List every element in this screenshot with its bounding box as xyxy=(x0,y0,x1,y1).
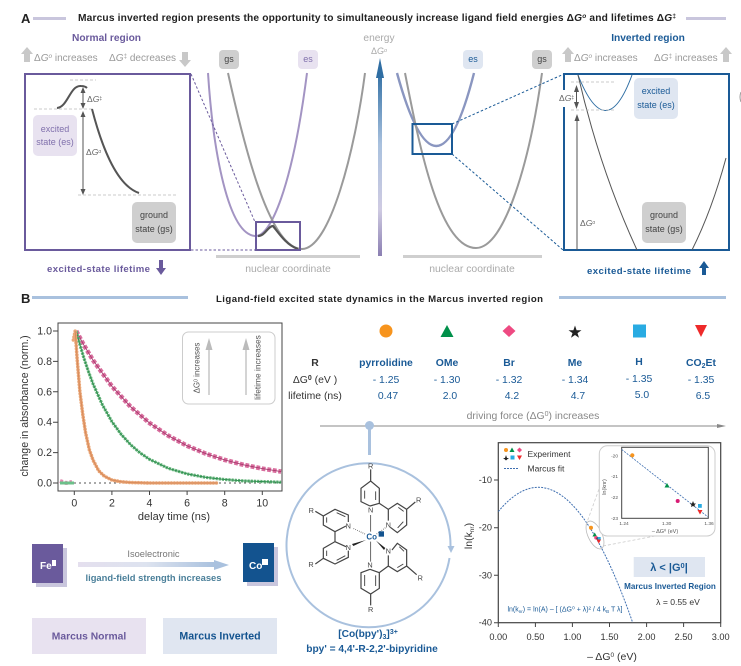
molecule structure: R xyxy=(418,573,423,582)
energy axis arrow: ΔG xyxy=(371,46,384,56)
panel: inverted region zoom: ΔG xyxy=(580,218,592,228)
inverted lifetime label xyxy=(587,261,709,277)
label gs normal xyxy=(219,50,239,69)
panel: inverted region zoom: state (gs) xyxy=(645,224,683,234)
axis ticks and labels: delay time (ns) xyxy=(138,511,210,523)
inset chart: 1.36 xyxy=(704,521,714,527)
panel: normal region zoom: ground xyxy=(140,210,168,220)
section A heading: ‡ xyxy=(672,13,676,20)
normal lifetime label: excited-state lifetime xyxy=(47,264,150,275)
data table: Me xyxy=(568,358,582,369)
panel: normal region zoom: o xyxy=(98,149,101,155)
equation: B xyxy=(606,609,609,614)
axis ticks and labels: 0.4 xyxy=(37,417,52,429)
normal region trends: o xyxy=(48,53,52,60)
molecule structure: R xyxy=(308,560,314,569)
complex formula: ] xyxy=(386,629,390,640)
panel: normal region zoom: ΔG xyxy=(87,94,99,104)
lambda callout: | xyxy=(685,562,688,574)
inset chart: -22 xyxy=(611,495,618,501)
panel: inverted region zoom: ground xyxy=(650,210,678,220)
axis ticks and labels: 10 xyxy=(256,498,268,510)
Marcus Normal box: Marcus Normal xyxy=(52,632,126,642)
equation: T λ] xyxy=(609,606,623,614)
Fe to Co isoelectronic arrow: Isoelectronic xyxy=(127,549,180,559)
normal region trends: increases xyxy=(52,53,98,64)
Fe to Co isoelectronic arrow: ligand-field strength increases xyxy=(86,572,221,583)
panel: normal region zoom: state (gs) xyxy=(135,224,173,234)
label es normal: es xyxy=(303,54,313,64)
nuclear coordinate axis right xyxy=(403,255,542,275)
panel: normal region zoom: excited xyxy=(41,124,69,134)
molecule structure: R xyxy=(368,462,373,471)
data table: - 1.25 xyxy=(373,375,400,386)
complex formula: 3+ xyxy=(390,629,398,636)
axis ticks and labels xyxy=(463,475,730,663)
lambda callout: Marcus Inverted Region xyxy=(624,582,716,591)
chart key box: increases xyxy=(192,343,202,379)
molecule structure: R xyxy=(309,506,314,515)
green series xyxy=(60,331,281,483)
driving force arrow: ) increases xyxy=(549,411,599,422)
panel: normal region zoom xyxy=(25,74,190,250)
legend: Experiment xyxy=(528,449,571,459)
molecule structure xyxy=(308,462,423,614)
section A heading: G xyxy=(664,13,672,24)
energy diagram: normal region parabolas xyxy=(191,73,365,250)
axis ticks and labels: 2.50 xyxy=(675,632,693,642)
inverted region trends: ‡ xyxy=(668,53,672,60)
chart key box: lifetime increases xyxy=(252,335,262,400)
section A heading: Marcus inverted region presents the opportunity to simultaneously increase ligand field energies ΔG xyxy=(78,13,582,24)
Fe to Co isoelectronic arrow xyxy=(32,543,278,587)
data table: lifetime (ns) xyxy=(288,391,342,402)
lambda callout: λ = 0.55 eV xyxy=(656,597,700,607)
molecule structure: N xyxy=(368,506,373,515)
inverted region trends: ΔG xyxy=(574,53,588,64)
data table: - 1.34 xyxy=(562,375,589,386)
complex formula: [Co(bpy') xyxy=(338,629,382,640)
molecule structure: N xyxy=(386,521,391,530)
axis ticks and labels: 1.00 xyxy=(563,632,581,642)
molecule structure: N xyxy=(346,521,351,530)
axis ticks and labels: -10 xyxy=(479,475,492,485)
normal region heading: Normal region xyxy=(72,33,141,44)
panel: inverted region zoom: state (es) xyxy=(637,100,675,110)
axis ticks and labels: nr xyxy=(469,526,476,532)
data cluster xyxy=(582,489,655,552)
panel: normal region zoom: ‡ xyxy=(99,96,102,102)
normal region trends: ΔG xyxy=(34,53,48,64)
panel: inverted region zoom: ‡ xyxy=(571,95,574,101)
inset chart: -21 xyxy=(611,474,618,480)
molecule structure: R xyxy=(368,605,373,614)
axis ticks and labels: (eV) xyxy=(614,651,637,663)
panel: normal region zoom: ΔG xyxy=(86,147,98,157)
data table: H xyxy=(635,357,643,368)
label gs inverted: gs xyxy=(537,54,547,64)
axis ticks and labels: -20 xyxy=(479,523,492,533)
molecule structure: Co xyxy=(366,532,377,541)
Fe to Co isoelectronic arrow: Co xyxy=(249,561,262,572)
data table: 6.5 xyxy=(696,391,710,402)
data table: Br xyxy=(503,358,515,369)
data table: - 1.35 xyxy=(626,374,653,385)
axis ticks and labels: – ΔG xyxy=(587,651,610,663)
Marcus fit curve xyxy=(498,487,633,623)
panel: normal region zoom: state (es) xyxy=(36,137,74,147)
data table: 2 xyxy=(702,363,706,370)
label es normal xyxy=(298,50,318,69)
stray panel mark at right edge xyxy=(740,92,741,102)
section A heading xyxy=(21,11,726,26)
data table: 0 xyxy=(308,375,312,382)
section B heading xyxy=(21,291,726,306)
inverted region heading: Inverted region xyxy=(611,33,685,44)
data table: CO xyxy=(686,358,702,369)
complex formula: 3 xyxy=(382,634,386,641)
lambda callout: λ < |G xyxy=(650,562,681,574)
label es inverted: es xyxy=(468,54,478,64)
inverted lifetime label: excited-state lifetime xyxy=(587,266,691,277)
equation: ln(k xyxy=(507,606,519,614)
data table: ΔG xyxy=(293,375,308,386)
data table: 4.7 xyxy=(571,391,585,402)
complex formula: bpy' = 4,4'-R-2,2'-bipyridine xyxy=(306,644,438,655)
axis ticks and labels: 0.8 xyxy=(37,356,52,368)
driving force arrow: driving force (ΔG xyxy=(467,411,545,422)
Marcus Inverted box: Marcus Inverted xyxy=(179,630,261,642)
data table: 5.0 xyxy=(635,390,649,401)
label gs normal: gs xyxy=(224,54,234,64)
data table: 0.47 xyxy=(378,391,398,402)
data table: (eV ) xyxy=(312,375,337,386)
cobalt complex circle xyxy=(287,421,454,627)
section A heading: o xyxy=(582,13,586,20)
normal region trends: decreases xyxy=(127,53,176,64)
Marcus Normal box xyxy=(32,618,146,654)
axis ticks and labels xyxy=(19,326,268,523)
axis ticks and labels: 8 xyxy=(222,498,228,510)
axis ticks and labels: 1.50 xyxy=(601,632,618,642)
equation: nr xyxy=(519,609,523,614)
axis ticks and labels: 0 xyxy=(71,498,77,510)
nuclear coordinate axis left: nuclear coordinate xyxy=(245,264,331,275)
lambda callout xyxy=(624,557,716,607)
Fe to Co isoelectronic arrow: Fe xyxy=(40,561,52,572)
energy axis arrow: o xyxy=(384,48,387,54)
inset chart: – ΔG⁰ (eV) xyxy=(652,528,678,535)
decay kinetics chart xyxy=(19,323,282,523)
section A heading: A xyxy=(21,11,31,26)
section A heading: and lifetimes Δ xyxy=(586,13,664,24)
axis ticks and labels: 0.0 xyxy=(37,478,52,490)
nuclear coordinate axis right: nuclear coordinate xyxy=(429,264,515,275)
molecule structure: N xyxy=(367,561,373,570)
inset chart: ln(knr) xyxy=(602,479,608,495)
data table: - 1.32 xyxy=(496,375,523,386)
data table: pyrrolidine xyxy=(359,358,413,369)
energy axis arrow xyxy=(363,33,395,256)
data table: 4.2 xyxy=(505,391,519,402)
inset chart xyxy=(599,446,715,536)
normal region trends: ΔG xyxy=(109,53,123,64)
inset chart: 1.24 xyxy=(619,521,629,527)
inverted region trends xyxy=(562,47,732,64)
inverted region trends: o xyxy=(588,53,592,60)
axis ticks and labels: 0.00 xyxy=(489,632,507,642)
Marcus fit chart xyxy=(463,443,730,663)
legend: Marcus fit xyxy=(528,464,565,474)
axis ticks and labels: 0.2 xyxy=(37,447,52,459)
nuclear coordinate axis left xyxy=(216,255,360,275)
complex formula xyxy=(306,629,438,655)
inset chart: 1.30 xyxy=(662,521,672,527)
axis ticks and labels: 1.0 xyxy=(37,326,52,338)
legend xyxy=(503,448,571,474)
chart key box xyxy=(182,332,275,404)
driving force arrow: 0 xyxy=(545,411,549,418)
axis ticks and labels: -30 xyxy=(479,570,492,580)
inverted region trends: increases xyxy=(672,53,718,64)
molecule structure: R xyxy=(416,496,421,505)
energy axis arrow: energy xyxy=(363,33,395,44)
panel: inverted region zoom: excited xyxy=(642,86,670,96)
axis ticks and labels: 4 xyxy=(147,498,153,510)
label es inverted xyxy=(463,50,483,69)
data table: - 1.35 xyxy=(688,375,715,386)
inverted region trends: increases xyxy=(592,53,638,64)
normal lifetime label xyxy=(47,260,166,275)
axis ticks and labels: -40 xyxy=(479,618,492,628)
normal region trends: ‡ xyxy=(123,53,127,60)
data table xyxy=(288,357,716,402)
Marcus Inverted box xyxy=(163,618,277,654)
panel: inverted region zoom: ΔG xyxy=(559,93,571,103)
driving force arrow xyxy=(320,411,726,428)
panel: inverted region zoom xyxy=(558,74,729,250)
normal region trends xyxy=(21,47,191,67)
pink series xyxy=(60,331,281,483)
section B heading: B xyxy=(21,291,30,306)
axis ticks and labels: ) xyxy=(463,523,475,526)
section B heading: Ligand-field excited state dynamics in the Marcus inverted region xyxy=(216,294,543,305)
molecule structure: N xyxy=(386,547,391,556)
axis ticks and labels: change in absorbance (norm.) xyxy=(19,335,31,477)
energy diagram: inverted region parabolas xyxy=(397,73,564,250)
data table: Et xyxy=(706,358,716,369)
panel: inverted region zoom: o xyxy=(592,220,595,226)
table markers xyxy=(380,324,707,338)
data table: OMe xyxy=(436,358,458,369)
inset chart: -23 xyxy=(611,516,618,522)
equation: ) = ln(A) – [ (ΔG⁰ + λ)² / 4 k xyxy=(523,606,607,614)
axis ticks and labels: 2 xyxy=(109,498,115,510)
axis ticks and labels: 0.6 xyxy=(37,386,52,398)
molecule structure: N xyxy=(346,543,351,552)
axis ticks and labels: ln(k xyxy=(463,532,475,549)
axis ticks and labels: 6 xyxy=(184,498,190,510)
data table: 2.0 xyxy=(443,391,457,402)
data table: - 1.30 xyxy=(434,375,461,386)
axis ticks and labels: 0 xyxy=(610,652,614,659)
axis ticks and labels: 2.00 xyxy=(638,632,656,642)
axis ticks and labels: 0.50 xyxy=(526,632,544,642)
axis ticks and labels: 3.00 xyxy=(712,632,730,642)
orange series xyxy=(73,331,217,483)
label gs inverted xyxy=(532,50,552,69)
lambda callout: 0 xyxy=(681,561,685,570)
inverted region trends: ΔG xyxy=(654,53,668,64)
chart key box: ΔG xyxy=(192,382,202,393)
chart key box: 0 xyxy=(194,379,200,382)
inset chart: -20 xyxy=(611,454,618,460)
data table: R xyxy=(311,358,319,369)
